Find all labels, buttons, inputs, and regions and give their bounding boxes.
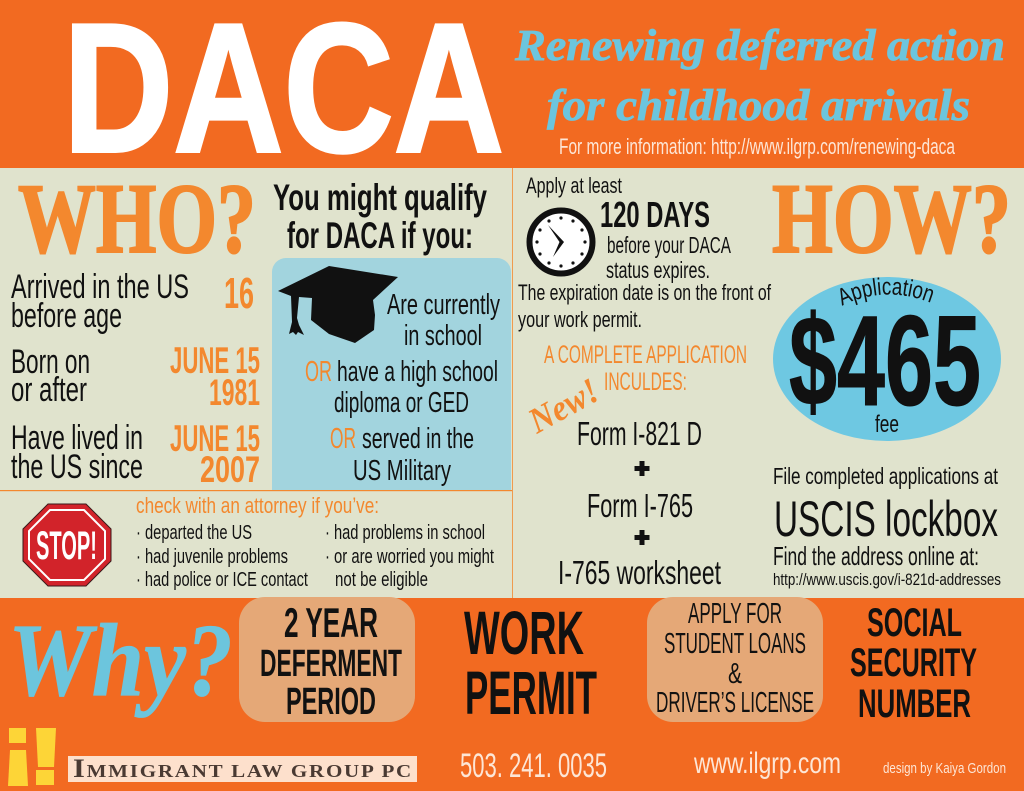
who criteria: JUNE 15 (170, 418, 260, 459)
form list: Form I-821 D (577, 415, 702, 452)
application requirements: INCULDES: (604, 368, 687, 396)
attorney list: · or are worried you might (325, 546, 494, 568)
benefit: student loans and license: & (728, 658, 742, 690)
qualification list: Are currently (387, 289, 500, 321)
deadline text: your work permit. (518, 307, 642, 332)
heading: you might qualify (273, 177, 487, 256)
new badge: New! (521, 370, 606, 441)
qualification list (305, 289, 500, 487)
benefit: social security number (850, 601, 977, 726)
heading: why: Why? (8, 603, 233, 718)
icon: stop sign (23, 504, 111, 586)
attorney list: not be eligible (335, 569, 428, 591)
icon: clock (530, 210, 592, 274)
benefit: work permit (464, 599, 597, 727)
benefit: student loans and license: APPLY FOR (688, 598, 782, 630)
qualification list: OR (330, 423, 356, 455)
panel: why (0, 597, 1024, 791)
icon: graduation cap (278, 266, 398, 343)
qualification list: have a high school (337, 356, 498, 388)
benefit: deferment: DEFERMENT (260, 643, 402, 685)
deadline text: before your DACA (607, 232, 731, 258)
who criteria: JUNE 15 (170, 340, 260, 381)
attorney list: · had problems in school (325, 522, 485, 544)
qualification list: in school (404, 320, 482, 352)
filing instructions (773, 463, 1001, 589)
who criteria: 1981 (209, 372, 260, 413)
panel: how (518, 163, 1011, 591)
benefit: deferment: PERIOD (286, 681, 376, 723)
form list (558, 415, 721, 591)
attorney list: · had police or ICE contact (136, 569, 308, 591)
who criteria: Arrived in the US (11, 268, 189, 306)
subtitle: Renewing deferred action (514, 21, 1005, 70)
who criteria: or after (11, 371, 87, 409)
attorney list: · departed the US (136, 522, 252, 544)
form list: I-765 worksheet (558, 554, 721, 591)
fee ellipse: fee (875, 411, 899, 438)
benefit: student loans and license (647, 597, 823, 722)
who criteria: Born on (11, 343, 90, 381)
benefit: student loans and license: DRIVER’S LICENSE (656, 687, 814, 719)
attorney list (136, 522, 494, 591)
website: www.ilgrp.com (693, 747, 841, 780)
qualification list: US Military (353, 455, 451, 487)
panel: qualifications (272, 258, 511, 490)
who criteria: Have lived in (11, 419, 143, 457)
heading: you might qualify: for DACA if you: (287, 215, 473, 256)
phone number: 503. 241. 0035 (460, 747, 607, 785)
deadline text: 120 DAYS (600, 194, 710, 235)
form list: Form I-765 (587, 487, 693, 524)
panel: who (11, 163, 511, 490)
subtitle: for childhood arrivals (547, 81, 970, 130)
panel: header (0, 0, 1024, 190)
subtitle (514, 21, 1005, 130)
benefit: deferment (239, 597, 415, 723)
attorney list: · had juvenile problems (136, 546, 288, 568)
benefit: work permit: WORK (464, 599, 584, 667)
panel: stop warning (23, 493, 494, 591)
qualification list: OR (305, 356, 332, 388)
deadline text (518, 173, 772, 332)
logo mark (8, 728, 56, 786)
deadline text: Apply at least (526, 173, 622, 198)
fee ellipse: Application (840, 277, 934, 306)
attorney heading: check with an attorney if you’ve: (136, 493, 379, 518)
benefit: student loans and license: STUDENT LOANS (664, 628, 806, 660)
heading: you might qualify: You might qualify (273, 177, 487, 218)
benefit: work permit: PERMIT (465, 659, 597, 727)
deadline text: The expiration date is on the front of (518, 280, 772, 305)
benefit: social security number: SOCIAL (867, 601, 962, 645)
who criteria (11, 268, 260, 490)
heading: who: WHO? (18, 163, 256, 274)
who criteria: 2007 (200, 449, 260, 490)
who criteria: 16 (224, 269, 254, 318)
application requirements: A COMPLETE APPLICATION (544, 341, 747, 369)
logo name: IMMIGRANT LAW GROUP PC (73, 754, 413, 783)
who criteria: before age (11, 297, 122, 335)
qualification list: diploma or GED (334, 387, 469, 419)
deadline text: status expires. (606, 257, 710, 283)
qualification list: served in the (362, 423, 474, 455)
benefit: deferment: 2 YEAR (284, 599, 378, 646)
icon: stop sign: STOP! (36, 524, 97, 568)
who criteria: the US since (11, 448, 143, 486)
application requirements (521, 341, 747, 591)
